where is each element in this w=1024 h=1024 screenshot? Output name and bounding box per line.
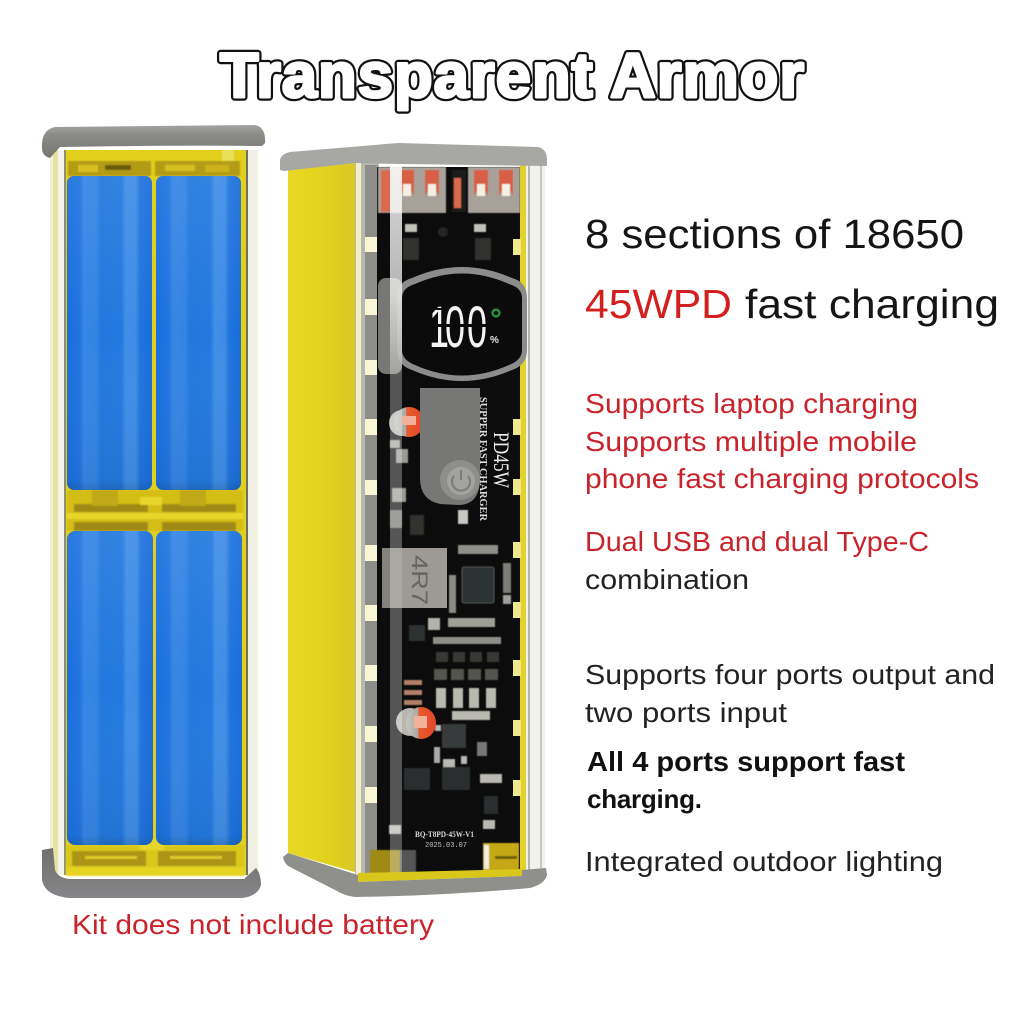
- left glass body: [50, 150, 258, 875]
- battery top right: [156, 176, 241, 490]
- bottom cap: [42, 848, 261, 898]
- text: laptop and protocols: phone fast charging protocols: [585, 463, 979, 494]
- board model text: BQ-T8PD-45W-V1: [415, 829, 474, 839]
- text: bold fast charging: All 4 ports support fast: [587, 746, 905, 777]
- board components upper: [390, 224, 491, 535]
- battery percentage digits: 1: [429, 295, 449, 360]
- capacitor lower: [396, 707, 436, 739]
- battery top left: [67, 176, 152, 490]
- text: laptop and protocols: Supports multiple mobile: [585, 426, 917, 457]
- board label PD45W: PD45W: [489, 432, 514, 488]
- board label super fast charger: SUPPER FAST CHARGER: [477, 397, 489, 522]
- text: ports: [585, 659, 995, 728]
- yellow side wall: [288, 163, 358, 873]
- heading: 8 sections: 8 sections of 18650: [585, 211, 964, 257]
- capacitor upper: [389, 407, 424, 437]
- battery bottom left: [67, 531, 153, 845]
- panel: left device with batteries: [42, 125, 265, 898]
- circuit board: [377, 167, 522, 873]
- heading: 45WPD fast charging: [585, 281, 999, 327]
- percent sign: %: [490, 335, 499, 346]
- Type-C ports: [370, 843, 519, 874]
- yellow bottom strip: [358, 869, 522, 882]
- text: bold fast charging: [587, 746, 905, 814]
- text: laptop and protocols: [585, 388, 979, 494]
- battery percentage digits: [429, 295, 490, 360]
- panel: right device with circuit board: [280, 143, 547, 897]
- bottom cap right: [283, 853, 547, 897]
- board components lower: [389, 545, 511, 834]
- text: lighting: Integrated outdoor lighting: [585, 846, 943, 877]
- charging indicator: [492, 310, 500, 316]
- top cap: [42, 125, 265, 158]
- top cap right: [280, 143, 547, 171]
- text: bold fast charging: charging.: [587, 784, 702, 814]
- left LED strip: [365, 237, 377, 803]
- board date text: 2025.03.07: [425, 842, 467, 850]
- USB ports: [378, 167, 520, 213]
- text: ports: Supports four ports output and: [585, 659, 995, 690]
- bottom contacts: [66, 838, 244, 876]
- top contacts: [68, 161, 240, 176]
- battery bottom right: [156, 531, 242, 845]
- heading: 45WPD fast charging: 45WPD: [585, 281, 732, 327]
- right LED strip: [513, 239, 521, 796]
- inductor 4R7: [382, 548, 447, 608]
- battery percentage digits: 0: [445, 295, 465, 360]
- title: Transparent Armor: [220, 41, 804, 111]
- left yellow battery holder: [66, 150, 246, 875]
- text: dual USB: combination: [585, 564, 749, 595]
- text: laptop and protocols: Supports laptop charging: [585, 388, 918, 419]
- middle contacts: [67, 490, 243, 531]
- battery percentage digits: 0: [467, 295, 487, 360]
- title: Transparent Armor: [220, 41, 804, 111]
- text: dual USB: [585, 526, 929, 595]
- caption: kit note: Kit does not include battery: [72, 909, 434, 940]
- power display: [378, 267, 527, 381]
- inductor 4R7: 4R7: [407, 555, 432, 605]
- text: ports: two ports input: [585, 697, 787, 728]
- text: dual USB: Dual USB and dual Type-C: [585, 526, 929, 557]
- right glass: [520, 165, 526, 870]
- glass left band: [355, 163, 379, 875]
- glass highlight strip: [390, 163, 402, 878]
- slider and power button: [420, 388, 480, 505]
- heading: 45WPD fast charging: fast charging: [745, 281, 999, 327]
